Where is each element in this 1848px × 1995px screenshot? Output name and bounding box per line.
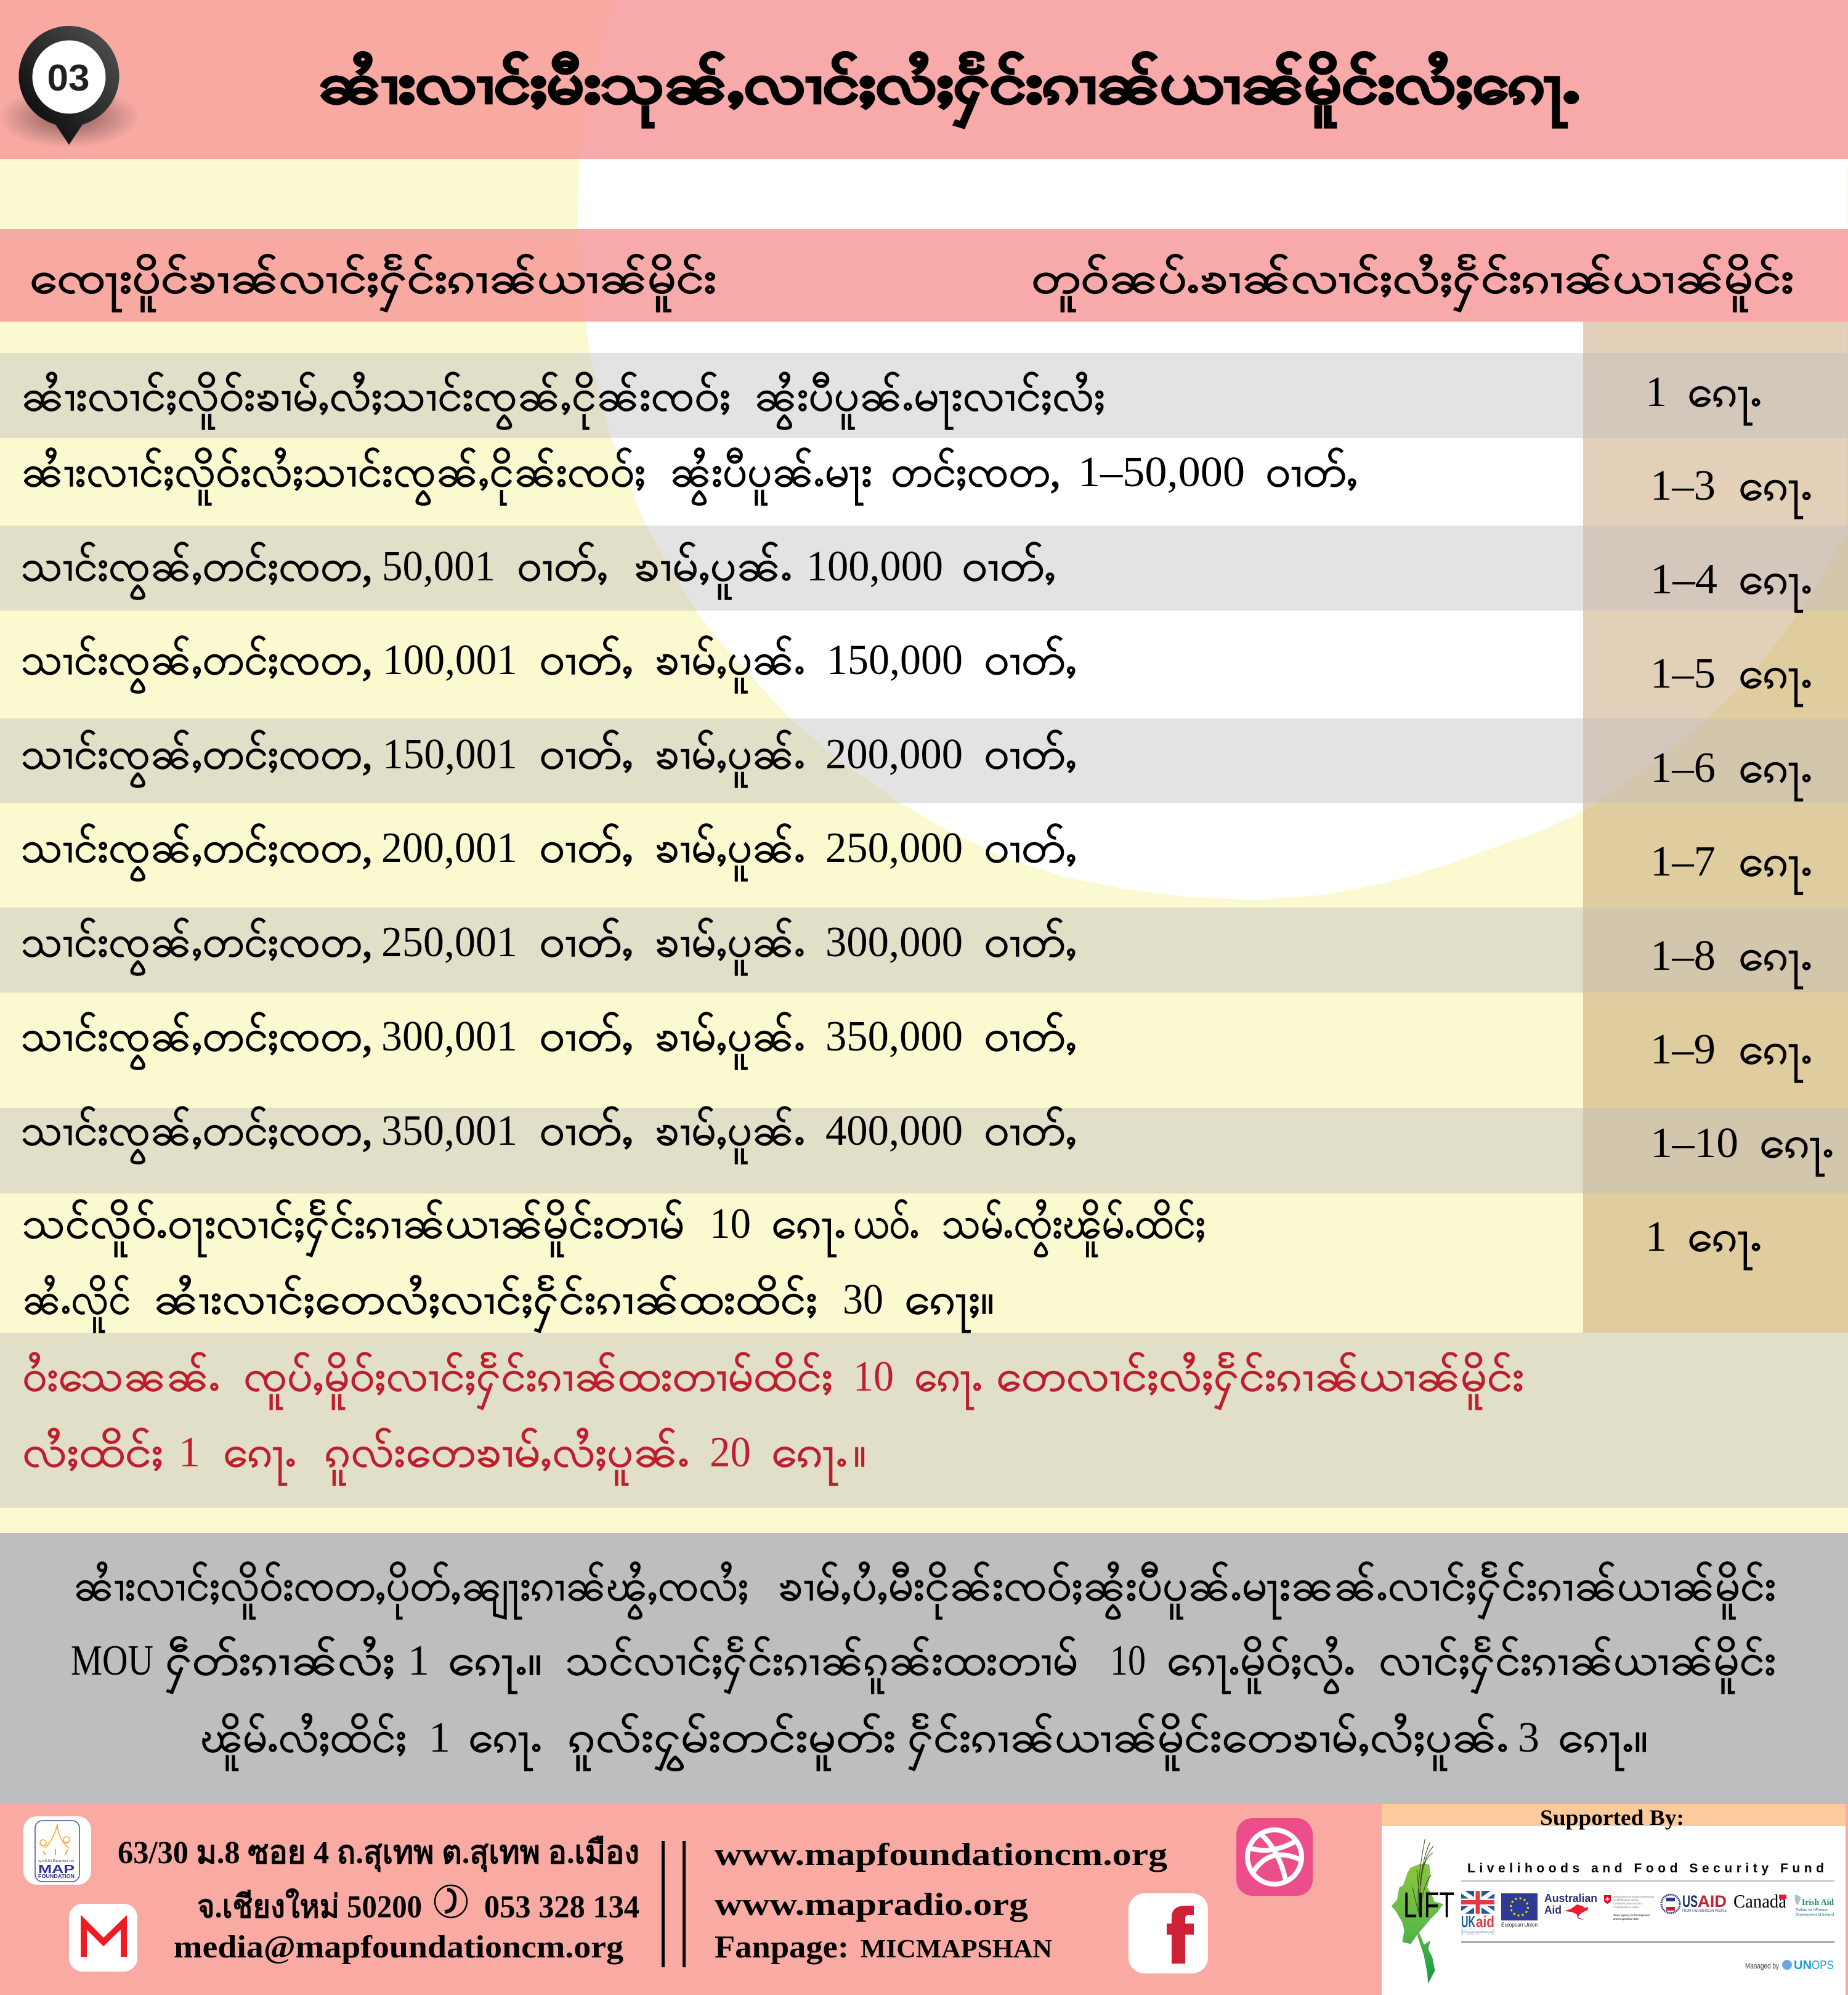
logo: Australian Aid (1544, 1892, 1597, 1920)
row 8 text: 350,000 (825, 1013, 963, 1060)
contact address: 053 328 134 (484, 1890, 639, 1925)
panel: supporters (1382, 1804, 1846, 1995)
row 3 text: 100,000 (806, 543, 943, 590)
panel: grey note: သင်လၢင်ႈႁႅင်းၵၢၼ်ၵူၼ်းထးတၢမ် (565, 1635, 1078, 1694)
row 7 text: ဝၢတ်ႇ (984, 917, 1077, 966)
row 5 text: ၶၢမ်ႇပူၼ်ႉ (655, 729, 805, 787)
row 10 text: ၼႆႉလိူင် (22, 1275, 131, 1333)
panel: grey note: MOU (71, 1637, 153, 1684)
row 9 text: 400,000 (825, 1107, 963, 1155)
logo: USAID: FROM THE AMERICAN PEOPLE (1682, 1909, 1727, 1913)
row 9 text: သၢင်းၸွၼ်ႇတင်ႈၸတ, (21, 1106, 373, 1164)
panel: grey note: 10 (1110, 1637, 1146, 1684)
row 4 text: ဝၢတ်ႇ (539, 635, 633, 684)
callout: red note: ။ (853, 1429, 866, 1476)
row 6 text: ဝၢတ်ႇ (984, 823, 1077, 872)
row 10 text: ၵေႃႈ။ (904, 1276, 994, 1333)
panel: grey note: လၢင်ႈႁႅင်းၵၢၼ်ယၢၼ်မိူင်း (1379, 1635, 1776, 1694)
logo: Swiss agency: Confédération suisse (1613, 1898, 1639, 1901)
row 6 text (21, 823, 1077, 881)
right column band (1583, 322, 1848, 1333)
row 9 text: ၶၢမ်ႇပူၼ်ႉ (655, 1106, 805, 1164)
row 10 text (22, 1198, 1206, 1333)
row 6 text: သၢင်းၸွၼ်ႇတင်ႈၸတ, (21, 823, 373, 881)
row 7 text: 300,000 (825, 919, 963, 966)
row 4 text: 150,000 (827, 636, 963, 684)
logo: Australian Aid: Aid (1544, 1904, 1562, 1916)
logo: Swiss agency: Confederazione Svizzera (1613, 1902, 1642, 1905)
row 9 text: ဝၢတ်ႇ (539, 1106, 633, 1155)
row 8 text (21, 1012, 1077, 1070)
row 5 text: သၢင်းၸွၼ်ႇတင်ႈၸတ, (21, 729, 373, 787)
panel: grey note: 1 (429, 1714, 450, 1761)
panel: grey note: ၽိူမ်ႉလႆႈထိင်ႈ (200, 1713, 407, 1771)
row 10 text: ၵေႃႉ (771, 1200, 846, 1257)
logo: Irish Aid (1795, 1895, 1834, 1917)
logo: UK aid: aid (1476, 1912, 1494, 1931)
logo: USAID: AID (1698, 1892, 1727, 1911)
row 6 text: ၶၢမ်ႇပူၼ်ႉ (655, 823, 805, 881)
website links: www.mapradio.org (715, 1887, 1028, 1922)
row 10 text: သင်လိူဝ်ႉဝႃးလၢင်ႈႁႅင်းၵၢၼ်ယၢၼ်မိူင်းတၢမ် (22, 1198, 684, 1258)
fund name: Livelihoods and Food Security Fund (1467, 1861, 1824, 1875)
right column: number of leave days: 1–8 (1650, 932, 1716, 980)
row 4 text: 100,001 (383, 636, 517, 684)
row 3 text: ၶၢမ်ႇပူၼ်ႉ (634, 542, 792, 599)
right column: number of leave days: 1–6 (1650, 744, 1716, 792)
panel: grey note: ႁဵတ်းၵၢၼ်လႆႈ (165, 1635, 395, 1694)
logo: European Union (1501, 1893, 1538, 1928)
row 8 text: ဝၢတ်ႇ (539, 1012, 633, 1060)
logo: managed by UNOPS: UN (1794, 1959, 1812, 1972)
right column: number of leave days: ၵေႃႉ (1738, 650, 1812, 707)
row 3 text (21, 542, 1056, 599)
panel: grey note: ၵေႃႉ။ (1558, 1714, 1648, 1771)
website links: MICMAPSHAN (861, 1935, 1052, 1964)
row 8 text: 300,001 (381, 1013, 517, 1060)
right column: number of leave days: ၵေႃႉ (1738, 932, 1812, 989)
row 5 text: 150,001 (383, 731, 517, 778)
logo: UK aid: ဗြိတိသျှပြည်သူများ၏အကူအညီ (1461, 1928, 1494, 1935)
website links: www.mapfoundationcm.org (715, 1837, 1167, 1872)
callout: red note: လႆႈထိင်ႈ (22, 1428, 163, 1476)
logo: USAID (1661, 1892, 1727, 1913)
right column: number of leave days: ၵေႃႉ (1759, 1119, 1834, 1176)
logo: managed by UNOPS: OPS (1812, 1959, 1834, 1972)
logo: LIFT map: LIFT (1403, 1885, 1454, 1925)
icon: MAP Foundation logo: MAP (38, 1863, 75, 1875)
icon: facebook (1129, 1893, 1208, 1973)
row 3 text: သၢင်းၸွၼ်ႇတင်ႈၸတ, (21, 542, 373, 599)
logo: Swiss agency: Confederaziun svizra (1613, 1906, 1639, 1909)
row 5 text: ဝၢတ်ႇ (984, 729, 1077, 778)
icon: MAP Foundation logo: FOUNDATION (38, 1874, 75, 1879)
row 4 text (21, 635, 1077, 693)
callout: red note: ၵူလ်းတေၶၢမ်ႇလႆႈပူၼ်ႉ (325, 1428, 689, 1485)
callout: red note: တေလၢင်ႈလႆႈႁႅင်းၵၢၼ်ယၢၼ်မိူင်း (996, 1351, 1524, 1410)
contact address: จ.เชียงใหม่ 50200 (197, 1888, 422, 1925)
row 6 text: ဝၢတ်ႇ (539, 823, 633, 872)
row 6 text: 250,000 (825, 824, 963, 872)
callout: red note: ၵေႃႉ (914, 1353, 983, 1410)
row 9 text: ဝၢတ်ႇ (984, 1106, 1077, 1155)
website links: Fanpage: (715, 1930, 849, 1965)
table row stripes (0, 353, 1848, 1508)
right column: number of leave days: 1–9 (1650, 1026, 1716, 1073)
footer band (0, 1804, 1848, 1995)
icon: mail (69, 1904, 137, 1972)
logo: Swiss agency: and Cooperation SDC (1613, 1917, 1639, 1920)
row 7 text: ဝၢတ်ႇ (539, 917, 633, 966)
row 4 text: ဝၢတ်ႇ (984, 635, 1077, 684)
contact address (118, 1835, 639, 1965)
right column: number of leave days: 1–3 (1650, 462, 1716, 510)
row 7 text (21, 917, 1077, 975)
right column: number of leave days: 1 (1645, 1213, 1667, 1261)
row 6 text: 200,001 (381, 824, 517, 872)
row 9 text: 350,001 (381, 1107, 517, 1155)
row 7 text: 250,001 (381, 919, 517, 966)
contact address: 63/30 ม.8 ซอย 4 ถ.สุเทพ ต.สุเทพ อ.เมือง (118, 1835, 639, 1872)
title: ၼၢႆးလၢင်ႈမီးသုၼ်ႇလၢင်ႈလႆႈႁႅင်းၵၢၼ်ယၢၼ်မိူင်းလႆႈၵေႃႉ (318, 52, 1579, 128)
right column: number of leave days: 1–4 (1650, 556, 1717, 603)
row 4 text: ၶၢမ်ႇပူၼ်ႉ (655, 635, 805, 693)
right column: number of leave days: ၵေႃႉ (1687, 1213, 1762, 1270)
row 3 text: ဝၢတ်ႇ (962, 542, 1056, 590)
logo: managed by UNOPS (1745, 1959, 1834, 1972)
header band (0, 0, 1848, 159)
callout: red note (22, 1351, 1524, 1485)
row 2 text: ၼွႆးပီပူၼ်ႉမႃး (670, 447, 872, 505)
icon: MAP Foundation logo: มูลนิธิเพื่อสุขภาพ (38, 1859, 74, 1863)
icon: phone (435, 1885, 467, 1917)
heading: right column: တူဝ်ၼပ်ႉၶၢၼ်လၢင်ႈလႆႈႁႅင်းၵၢၼ်ယၢၼ်မိူင်း (1031, 253, 1794, 312)
icon: number pin 03: 03 (47, 57, 90, 99)
callout: red note: ၵေႃႉ (771, 1429, 848, 1485)
row 10 text: ၼၢႆးလၢင်ႈတေလႆႈလၢင်ႈႁႅင်းၵၢၼ်ထးထိင်ႈ (153, 1274, 817, 1333)
background: large white circle (577, 0, 1848, 900)
logo: Irish Aid: Government of Ireland (1796, 1913, 1834, 1917)
right column: number of leave days: ၵေႃႉ (1738, 744, 1812, 801)
icon: dribbble (1236, 1818, 1313, 1896)
right column: number of leave days (1645, 368, 1834, 1270)
callout: red note: 20 (710, 1429, 751, 1476)
row 9 text (21, 1106, 1077, 1164)
logo: managed by UNOPS: Managed by (1745, 1961, 1779, 1970)
row 2 text: ၼၢႆးလၢင်ႈလိူဝ်းလႆႈသၢင်းၸွၼ်ႇငိုၼ်းၸဝ်ႈ (21, 447, 646, 505)
logo: Irish Aid: Rialtas na hÉireann (1796, 1907, 1828, 1912)
right column: number of leave days: ၵေႃႉ (1738, 838, 1812, 895)
logo: LIFT map (1392, 1839, 1454, 1983)
row 2 text (21, 447, 1358, 505)
row 5 text (21, 729, 1077, 787)
row 5 text: 200,000 (825, 731, 963, 778)
row 8 text: သၢင်းၸွၼ်ႇတင်ႈၸတ, (21, 1012, 373, 1070)
website links (715, 1837, 1167, 1965)
logo: European Union: European Union (1501, 1922, 1538, 1928)
panel: grey note (0, 1533, 1848, 1804)
heading: supported by: Supported By: (1540, 1805, 1684, 1830)
logo: Australian Aid: Australian (1544, 1892, 1597, 1904)
logo: Swiss agency (1604, 1895, 1655, 1920)
row 3 text: 50,001 (382, 543, 495, 590)
panel: grey note: ၵေႃႉ။ (448, 1637, 542, 1694)
logo: UK aid (1461, 1891, 1494, 1935)
logo: Irish Aid: Irish Aid (1802, 1898, 1834, 1908)
logo: Swiss agency: Schweizerische Eidgenossenschaft (1613, 1895, 1655, 1898)
icon: number pin 03 (0, 26, 140, 148)
right column: number of leave days: 1–10 (1650, 1119, 1738, 1167)
panel: grey note: 3 (1518, 1714, 1539, 1761)
logo: UK aid: UK (1461, 1912, 1475, 1931)
row 2 text: 1–50,000 (1078, 449, 1245, 496)
row 7 text: သၢင်းၸွၼ်ႇတင်ႈၸတ, (21, 917, 373, 975)
row 10 text: 10 (710, 1200, 751, 1248)
callout: red note: ၸူပ်ႇမိူဝ်ႈလၢင်ႈႁႅင်းၵၢၼ်ထးတၢမ်ထိင်ႈ (243, 1351, 833, 1410)
callout: red note: ဝႆးသေၼၼ်ႉ (22, 1352, 220, 1400)
panel: grey note: ၶၢမ်ႇပႆႇမီးငိုၼ်းၸဝ်ႈၼွႆးပီပူၼ်ႉမႃးၼၼ်ႉလၢင်ႈႁႅင်းၵၢၼ်ယၢၼ်မိူင်း (778, 1561, 1776, 1620)
right column: number of leave days: ၵေႃႉ (1738, 556, 1812, 612)
logo: Swiss agency: Swiss Agency for Development (1613, 1914, 1650, 1917)
row 2 text: ဝၢတ်ႇ (1265, 447, 1358, 496)
callout: red note: ၵေႃႉ (223, 1429, 296, 1485)
row 1 text: ၼွႆးပီပူၼ်ႉမႃးလၢင်ႈလႆႈ (754, 372, 1105, 429)
panel: grey note: ၵေႃႉ (468, 1714, 542, 1771)
column heading band (0, 229, 1848, 322)
row 3 text: ဝၢတ်ႇ (517, 542, 608, 590)
right column: number of leave days: 1 (1645, 368, 1667, 416)
row 1 text (21, 372, 1105, 429)
row 4 text: သၢင်းၸွၼ်ႇတင်ႈၸတ, (21, 635, 373, 693)
right column: number of leave days: 1–5 (1650, 650, 1716, 697)
row 7 text: ၶၢမ်ႇပူၼ်ႉ (655, 917, 805, 975)
row 10 text: သမ်ႉၸွႆးၽိူမ်ႉထိင်ႈ (942, 1199, 1206, 1257)
callout: red note: 1 (179, 1429, 200, 1476)
row 10 text: 30 (843, 1276, 883, 1323)
logo: Canada: Canada (1733, 1890, 1786, 1912)
panel: grey note: ၼၢႆးလၢင်ႈလိူဝ်းၸတႇပိုတ်ႇၼျႃးၵၢၼ်ၽွႆႇၸလႆႈ (73, 1561, 748, 1620)
heading: left column: ၸေႃးပိူင်ၶၢၼ်လၢင်ႈႁႅင်းၵၢၼ်ယၢၼ်မိူင်း (30, 253, 716, 312)
right column: number of leave days: ၵေႃႉ (1738, 462, 1812, 519)
right column: number of leave days: ၵေႃႉ (1738, 1026, 1812, 1083)
row 1 text: ၼၢႆးလၢင်ႈလိူဝ်းၶၢမ်ႇလႆႈသၢင်းၸွၼ်ႇငိုၼ်းၸဝ်ႈ (21, 372, 731, 429)
row 10 text: ယဝ်ႉ (853, 1199, 919, 1248)
right column: number of leave days: ၵေႃႉ (1687, 368, 1762, 425)
row 2 text: တင်ႈၸတ, (891, 447, 1061, 496)
row 5 text: ဝၢတ်ႇ (539, 729, 633, 778)
panel: grey note: 1 (408, 1637, 429, 1684)
contact address: media@mapfoundationcm.org (174, 1930, 623, 1965)
panel: grey note: ႁႅင်းၵၢၼ်ယၢၼ်မိူင်းတေၶၢမ်ႇလႆႈပူၼ်ႉ (907, 1712, 1509, 1771)
row 8 text: ဝၢတ်ႇ (984, 1012, 1077, 1060)
logo: USAID: US (1682, 1892, 1698, 1911)
icon: MAP Foundation logo (23, 1816, 91, 1885)
panel: grey note: ၵေႃႉမိူဝ်ႈလွႆႉ (1167, 1636, 1355, 1694)
row 8 text: ၶၢမ်ႇပူၼ်ႉ (655, 1012, 805, 1070)
right column: number of leave days: 1–7 (1650, 838, 1716, 885)
panel: grey note: ၵူလ်းႁွမ်းတင်းမူတ်း (568, 1713, 896, 1771)
footer divider (662, 1841, 686, 1967)
callout: red note: 10 (853, 1353, 894, 1400)
